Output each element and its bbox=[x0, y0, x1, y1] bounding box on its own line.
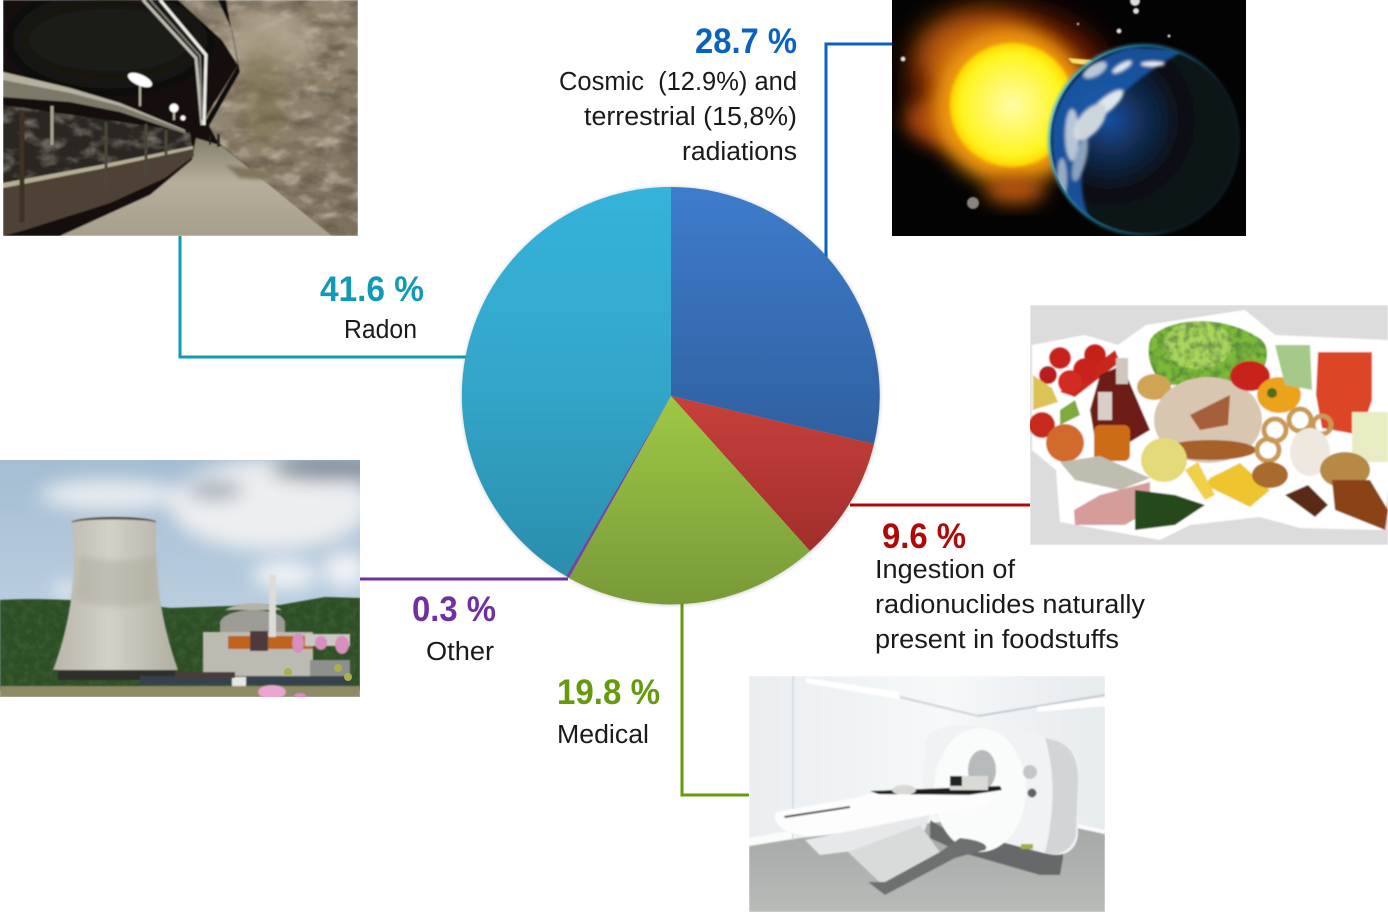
slice: medical 19.8% bbox=[569, 396, 810, 604]
label: cosmic and terrestrial bbox=[559, 22, 797, 166]
photo: underground tunnel bbox=[3, 0, 358, 236]
connector line: ingestion bbox=[850, 504, 1030, 506]
connector line: medical bbox=[682, 604, 749, 795]
slice: radon 41.6% bbox=[462, 187, 671, 576]
description: medical: Medical bbox=[557, 721, 649, 749]
description: cosmic and terrestrial: radiations bbox=[682, 138, 797, 166]
description: other: Other bbox=[426, 638, 495, 666]
pie chart bbox=[462, 187, 880, 605]
description: ingestion: Ingestion of bbox=[875, 556, 1016, 584]
value: 19.8%: 19.8 % bbox=[557, 673, 660, 712]
connector line: radon bbox=[180, 236, 467, 357]
label: ingestion bbox=[875, 517, 1145, 654]
photo: sun and Earth bbox=[892, 0, 1246, 236]
photo: nuclear power plant bbox=[0, 459, 390, 699]
label: medical bbox=[557, 673, 660, 749]
description: radon: Radon bbox=[344, 316, 417, 344]
description: cosmic and terrestrial: terrestrial (15,8%) bbox=[584, 103, 797, 131]
slice: cosmic and terrestrial 28.7% bbox=[671, 187, 880, 444]
value: 0.3%: 0.3 % bbox=[412, 590, 496, 629]
slice: ingestion 9.6% bbox=[671, 396, 874, 551]
description: cosmic and terrestrial: Cosmic (12.9%) and bbox=[559, 68, 797, 96]
label: other bbox=[412, 590, 496, 666]
label: radon bbox=[320, 270, 424, 344]
connector line: other bbox=[360, 578, 568, 580]
slice: other 0.3% bbox=[566, 396, 671, 578]
value: 41.6%: 41.6 % bbox=[320, 270, 424, 309]
photo: assorted foods bbox=[1029, 305, 1388, 545]
connector line: cosmic bbox=[826, 44, 892, 258]
value: 9.6%: 9.6 % bbox=[882, 517, 966, 556]
photo: CT scanner room bbox=[749, 676, 1105, 912]
description: ingestion: radionuclides naturally bbox=[875, 591, 1145, 619]
value: 28.7%: 28.7 % bbox=[695, 22, 797, 61]
description: ingestion: present in foodstuffs bbox=[875, 626, 1119, 654]
